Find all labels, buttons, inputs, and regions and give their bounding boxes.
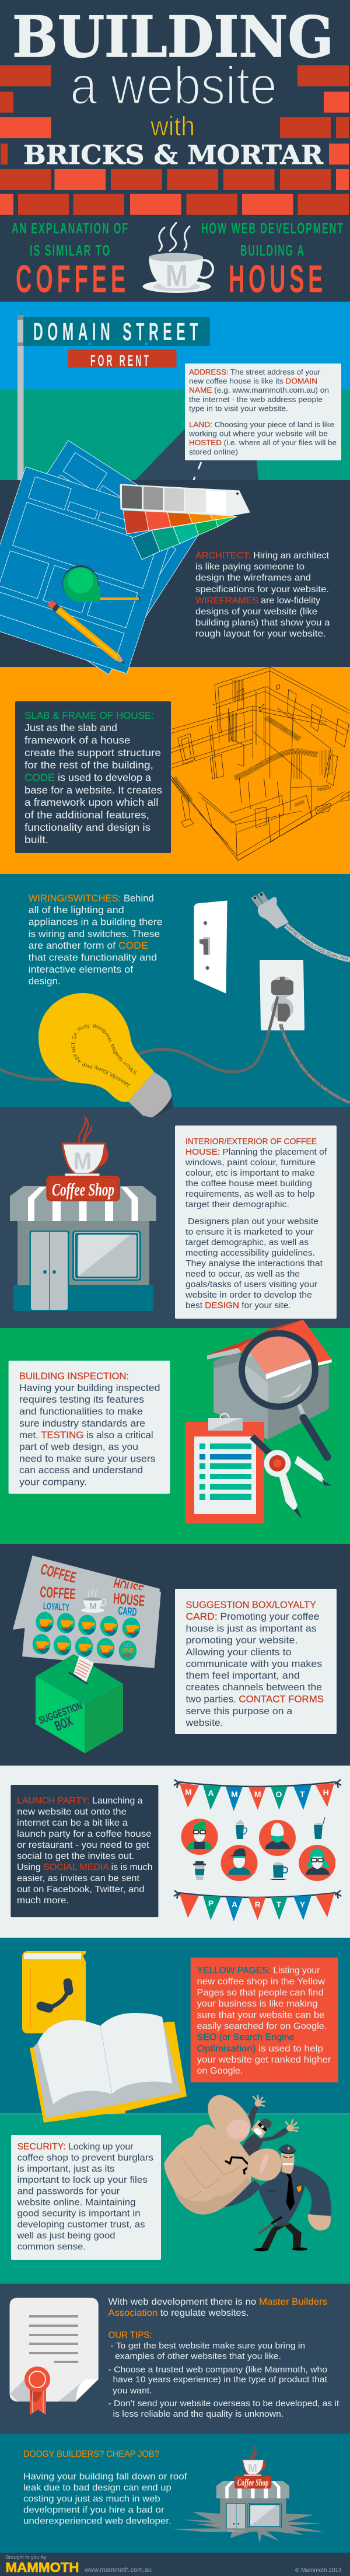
- illustration: compass: [252, 1436, 332, 1519]
- text box: launch party: new website out onto the: [17, 1807, 127, 1817]
- text box: suggestion box: CARD: Promoting your coffee: [186, 1611, 320, 1622]
- subtitle: left: [12, 219, 129, 259]
- shop: cup on roof: [62, 1117, 108, 1176]
- tape measure: [62, 565, 140, 603]
- text box: yellow pages: Pages so that people can find: [197, 1988, 323, 1998]
- sign hooks: [89, 342, 148, 351]
- sign: domain street: DOMAIN STREET: [33, 318, 202, 346]
- text box: launch party: [10, 1785, 158, 1917]
- footer: website: www.mammoth.com.au: [84, 2567, 152, 2574]
- icon: plug with cable: [251, 892, 350, 963]
- text: dodgy builders: development if you hire a bad or: [23, 2505, 164, 2515]
- sign pole: [18, 315, 24, 480]
- text box: building inspection: met. TESTING is also a critical: [19, 1429, 153, 1441]
- text box: slab and frame: for the rest of the building,: [24, 759, 153, 771]
- text box: suggestion box: [175, 1589, 337, 1734]
- text box: suggestion box: website.: [185, 1717, 223, 1728]
- icon: light switch: [194, 901, 227, 993]
- text box: security: good security is important in: [18, 2209, 140, 2218]
- text box: slab and frame: Just as the slab and: [24, 722, 117, 733]
- illustration: crack behind shop: [170, 2512, 326, 2543]
- small shop: cup: [243, 2446, 265, 2476]
- text box: yellow pages: your website get ranked higher: [197, 2055, 331, 2065]
- footer: copyright: © Mammoth 2014: [295, 2567, 342, 2574]
- text box: building inspection: part of web design, as you: [19, 1441, 138, 1452]
- text box: suggestion box: two parties. CONTACT FORMS: [186, 1693, 324, 1705]
- icon: closed phone book: [22, 1951, 86, 2033]
- shop: cup on roof: M: [74, 1148, 92, 1174]
- bricks: background wall: [0, 65, 349, 215]
- text box: suggestion box: creates channels between the: [186, 1682, 322, 1693]
- bunting: mammoth: [174, 1780, 341, 1811]
- icon: coffee cup: M: [166, 259, 188, 293]
- text box: slab and frame: [15, 701, 171, 853]
- text box: launch party: Using SOCIAL MEDIA is is much: [17, 1862, 153, 1872]
- text box: suggestion box: Allowing your clients to: [186, 1647, 292, 1658]
- text: tips list: examples of other websites that you like.: [115, 2351, 281, 2361]
- card: stamps: ONE: [122, 1648, 134, 1654]
- text: dodgy builders: [23, 2472, 187, 2526]
- text box: launch party: much more.: [17, 1896, 69, 1906]
- text box: building inspection: your company.: [19, 1476, 87, 1488]
- subtitle: left: AN EXPLANATION OF: [12, 219, 129, 237]
- suggestion box: [36, 1654, 123, 1753]
- text: wiring: that create functionality and: [29, 952, 157, 963]
- text box: yellow pages: on Google.: [197, 2066, 243, 2076]
- small shop: sign: [235, 2476, 271, 2488]
- text box: address and land: working out where your website will be: [188, 429, 328, 438]
- suggestion box: BOX: [52, 1713, 75, 1735]
- text box: security: [11, 2135, 161, 2260]
- text box: launch party: internet can be a bit like a: [17, 1818, 128, 1828]
- panel: security: [0, 2114, 350, 2284]
- loyalty card: front: HOUSE: [113, 1589, 145, 1610]
- text box: slab and frame: create the support structure: [24, 747, 161, 759]
- text: master builders intro: [108, 2297, 327, 2318]
- text box: interior and exterior: to ensure it is marketed to your: [186, 1227, 314, 1237]
- bunting: mammoth: H: [323, 1788, 329, 1797]
- text: dodgy builders: underexperienced web developer.: [23, 2516, 172, 2526]
- icon: open book: [30, 2013, 187, 2123]
- illustration: crack in front of shop: [208, 2528, 304, 2543]
- blueprint: back sheet: [0, 441, 203, 674]
- text box: slab and frame: CODE is used to develop a: [24, 771, 151, 783]
- text box: suggestion box: house is just as important as: [186, 1623, 316, 1634]
- text box: building inspection: BUILDING INSPECTION:: [19, 1371, 129, 1382]
- text box: suggestion box: serve this purpose on a: [186, 1705, 293, 1717]
- text box: interior and exterior: target their demographic.: [186, 1200, 289, 1210]
- loyalty card: front: LOYALTY: [43, 1600, 70, 1613]
- footer: [0, 2553, 350, 2576]
- text box: security: is important, just as its: [18, 2164, 114, 2174]
- text box: interior and exterior: target demographic, as well as: [186, 1238, 309, 1247]
- text box: suggestion box: communicate with you makes: [186, 1658, 322, 1669]
- text box: interior and exterior: windows, paint colour, furniture: [185, 1158, 316, 1168]
- text box: yellow pages: sure that your website can be: [197, 2011, 325, 2020]
- text box: slab and frame: SLAB & FRAME OF HOUSE:: [24, 709, 154, 721]
- blueprint: front sheet: [0, 467, 178, 673]
- text box: launch party: launch party for a coffee house: [17, 1829, 152, 1839]
- text: architect: [195, 551, 330, 639]
- shop: sign: [46, 1176, 120, 1201]
- text box: address and land: the internet - the web address people: [189, 395, 323, 404]
- card: small cup: M: [89, 1602, 97, 1612]
- text box: yellow pages: new coffee shop in the Yellow: [197, 1977, 326, 1987]
- title: with: with: [150, 111, 195, 141]
- loyalty card: front: CARD: [118, 1605, 137, 1619]
- card: stamps: [33, 1612, 140, 1661]
- text: tips list: - To get the best website make sure you bring in: [111, 2341, 305, 2351]
- text box: yellow pages: YELLOW PAGES: Listing your: [197, 1966, 320, 1976]
- text: wiring: all of the lighting and: [29, 904, 124, 915]
- illustration: coffee shop: [10, 1117, 156, 1311]
- text box: launch party: social to get the invites out.: [17, 1851, 134, 1861]
- cable: outlet to edge: [279, 1023, 350, 1105]
- text box: address and land: NAME (e.g. www.mammoth.com.au) on: [189, 386, 329, 394]
- text box: interior and exterior: requirements, as well as to help: [186, 1189, 315, 1199]
- heading: dodgy builders: DODGY BUILDERS? CHEAP JOB?: [23, 2449, 159, 2459]
- loyalty card: back: COFFEE: [38, 1560, 78, 1586]
- card: stamps: FREE: [123, 1653, 133, 1659]
- card: small cup: [81, 1589, 106, 1613]
- text box: address and land: HOSTED (i.e. where all of your files will be: [189, 438, 337, 447]
- icon: certificate: [9, 2298, 99, 2415]
- text: wiring: is wiring and switches. These: [29, 928, 160, 939]
- text: dodgy builders: Having your building fall down or roof: [23, 2472, 187, 2482]
- small shop: window: [247, 2503, 282, 2528]
- panel: suggestion box and loyalty card: [0, 1544, 350, 1766]
- text box: security: coffee shop to prevent burglars: [18, 2153, 153, 2163]
- icon: iced drink: [314, 1817, 325, 1839]
- bunting: party: P: [208, 1899, 214, 1908]
- panel: building inspection: [0, 1320, 350, 1544]
- text: architect: designs of your website (like: [195, 607, 317, 617]
- text box: yellow pages: your business is like making: [197, 1999, 317, 2009]
- text box: security: developing customer trust, as: [18, 2220, 145, 2230]
- text box: launch party: easier, as invites can be sent: [17, 1874, 140, 1883]
- text: architect: is like paying someone to: [195, 562, 304, 572]
- avatar: teal hair woman: [299, 1845, 335, 1881]
- icon: wall outlet: [260, 960, 304, 1030]
- text: tips list: [108, 2341, 340, 2419]
- swatches: grey strip: [120, 484, 250, 516]
- text box: interior and exterior: need to occur, as well as the: [186, 1269, 300, 1279]
- shop: door: [30, 1231, 69, 1310]
- icon: cup on saucer: [269, 1862, 288, 1880]
- pencil: [47, 600, 127, 666]
- text box: building inspection: sure industry standards are: [19, 1418, 145, 1429]
- cable: outlet to edge: CSS3, HTML5, PHP, JAVASCRIPT, JQUERY, ASP.NET, C#, RUBY, MAGENTO, WORDPRESS, SITECORE: [280, 1024, 350, 1103]
- small shop: wall: [220, 2498, 286, 2531]
- thumb: [247, 2148, 281, 2180]
- text box: security: important to lock up your files: [18, 2175, 148, 2185]
- panel: yellow pages: [0, 1938, 350, 2123]
- text box: launch party: or restaurant - you need to get: [17, 1840, 149, 1850]
- cable: bulb to outlet: [0, 997, 278, 1079]
- shop: base: [13, 1285, 153, 1311]
- wireframe house: [171, 667, 349, 861]
- sign: for rent: [68, 349, 176, 369]
- text box: interior and exterior: [175, 1126, 337, 1319]
- suggestion box: SUGGESTION: [37, 1700, 84, 1726]
- swatches: orange strip: [123, 511, 237, 534]
- text: master builders intro: Association to regulate websites.: [108, 2308, 249, 2318]
- text: tips list: you want.: [113, 2386, 152, 2396]
- text box: slab and frame: built.: [24, 834, 48, 845]
- text: architect: building plans) that show you a: [195, 618, 330, 628]
- text: wiring: appliances in a building there: [29, 916, 163, 928]
- text box: yellow pages: easily searched for on Google.: [197, 2021, 327, 2032]
- panel: domain and land: [0, 302, 350, 480]
- loyalty card: back: HOUSE: [111, 1575, 145, 1599]
- small shop: door: [226, 2503, 246, 2531]
- text box: building inspection: can access and understand: [19, 1464, 143, 1476]
- small shop: awning: [216, 2481, 289, 2498]
- bunting: party: R: [255, 1900, 261, 1909]
- shop: awning: [10, 1186, 156, 1221]
- text box: address and land: type in to visit your website.: [189, 404, 288, 413]
- text box: interior and exterior: HOUSE: Planning the placement of: [186, 1147, 327, 1157]
- text box: slab and frame: functionality and design is: [24, 822, 150, 833]
- road: [135, 427, 258, 480]
- sign: for rent: FOR RENT: [90, 352, 151, 369]
- subtitle: right: [201, 219, 344, 259]
- illustration: house: [207, 1320, 332, 1439]
- text box: address and land: stored online): [189, 448, 238, 456]
- subtitle: left: IS SIMILAR TO: [30, 242, 111, 259]
- text box: yellow pages: SEO (or Search Engine: [197, 2033, 295, 2042]
- icon: plug with cable: ASP.NET, HTML5, CSS3, jQuery, PHP: [285, 925, 349, 960]
- text box: building inspection: requires testing its features: [19, 1394, 144, 1405]
- swatches: green strip: [132, 516, 237, 560]
- panel: header: [0, 0, 350, 302]
- illustration: sinking coffee shop: [216, 2446, 289, 2531]
- text box: launch party: LAUNCH PARTY: Launching a: [17, 1796, 143, 1806]
- bunting: party: T: [276, 1900, 282, 1909]
- text box: building inspection: [9, 1361, 170, 1494]
- text: architect: WIREFRAMES are low-fidelity: [195, 596, 320, 606]
- text: architect: ARCHITECT: Hiring an architect: [195, 551, 330, 561]
- text box: slab and frame: base for a website. It creates: [24, 784, 162, 796]
- panel: architect: [0, 441, 350, 674]
- panel: master builders and tips: [0, 2284, 350, 2434]
- title: Building: BUILDING: [12, 4, 334, 70]
- text box: security: website online. Maintaining: [16, 2197, 136, 2208]
- text box: yellow pages: Optimisation) is used to help: [197, 2044, 323, 2054]
- footer: mammoth logo: MAMMOTH: [6, 2560, 79, 2575]
- text: tips list: - Don’t send your website overseas to be developed, as it: [108, 2399, 340, 2409]
- road markings: [194, 462, 201, 480]
- text: tips list: is less reliable and the quality is unknown.: [113, 2409, 284, 2419]
- panel: interior and exterior of coffee house: [0, 1107, 350, 1328]
- text: wiring: [29, 893, 163, 987]
- text box: address and land: ADDRESS: The street address of your: [189, 368, 321, 376]
- illustration: magnifying glass: [242, 1333, 327, 1457]
- icon: mug with foam: [236, 1819, 247, 1839]
- illustration: fist, burglar and police officer: [164, 2095, 331, 2251]
- text box: interior and exterior: best DESIGN for your site.: [186, 1301, 290, 1310]
- shop: building wall: [18, 1221, 149, 1285]
- icon: light bulb: [38, 993, 173, 1117]
- text box: slab and frame: a framework upon which all: [24, 796, 159, 808]
- text box: suggestion box: SUGGESTION BOX/LOYALTY: [186, 1599, 316, 1610]
- text box: interior and exterior: goals/tasks of users visiting your: [186, 1280, 317, 1289]
- text: architect: rough layout for your website.: [195, 629, 326, 639]
- heading: coffee: COFFEE: [16, 257, 130, 301]
- small shop: cup: M: [248, 2462, 257, 2475]
- text box: yellow pages: [191, 1958, 338, 2082]
- icon: takeaway cup: [193, 1861, 206, 1880]
- text box: interior and exterior: website in order to develop the: [185, 1290, 312, 1300]
- text box: slab and frame: framework of a house: [24, 734, 131, 746]
- title: a website: a website: [70, 56, 277, 116]
- bunting: mammoth: O: [276, 1789, 282, 1799]
- panel: launch party: [0, 1766, 350, 1938]
- text box: building inspection: Having your building inspected: [19, 1382, 160, 1393]
- icon: light bulb: Javascript, jQuery, PHP, ASP.NET, C#, Ruby, Wordpress, Magento, HTML5, CSS3: [71, 1023, 136, 1088]
- burglar: [240, 2096, 299, 2159]
- text: tips list: - Choose a trusted web company (like Mammoth, who: [108, 2365, 327, 2375]
- text: wiring: interactive elements of: [29, 964, 133, 975]
- panel: wiring and switches: [0, 874, 350, 1117]
- text box: interior and exterior: INTERIOR/EXTERIOR OF COFFEE: [186, 1137, 317, 1147]
- text: dodgy builders: costing you just as much in web: [23, 2494, 160, 2504]
- colour swatches: [120, 484, 250, 560]
- text box: address and land: [185, 363, 341, 460]
- text: dodgy builders: leak due to bad design can end up: [23, 2483, 172, 2493]
- shop: window: [72, 1231, 141, 1281]
- loyalty card: front: [22, 1580, 161, 1668]
- bunting: mammoth: A: [208, 1788, 214, 1798]
- text box: security: common sense.: [18, 2242, 86, 2252]
- text box: building inspection: need to make sure your users: [19, 1453, 155, 1464]
- text box: security: SECURITY: Locking up your: [18, 2142, 134, 2152]
- text box: suggestion box: them feel important, and: [186, 1670, 300, 1681]
- bunting: party: A: [232, 1900, 237, 1909]
- text: architect: specifications for your website.: [195, 585, 329, 595]
- avatar: cap man: [220, 1845, 258, 1881]
- footer: brought to you by: Brought to you by: [6, 2554, 47, 2561]
- text: tips list: have 10 years experience) in the type of product that: [113, 2375, 328, 2385]
- text box: interior and exterior: Designers plan out your website: [188, 1217, 318, 1226]
- loyalty card: back: [13, 1556, 160, 1630]
- text box: interior and exterior: colour, etc is important to make: [186, 1168, 315, 1178]
- loyalty card: front: COFFEE: [40, 1583, 76, 1603]
- text box: address and land: LAND: Choosing your piece of land is like: [189, 420, 334, 429]
- text box: interior and exterior: meeting accessibility guidelines.: [186, 1248, 315, 1258]
- icon: coffee cup: [142, 223, 213, 293]
- police officer: [222, 2144, 331, 2251]
- text: wiring: are another form of CODE: [29, 940, 148, 951]
- text box: security: well as just being good: [16, 2231, 116, 2241]
- text box: launch party: out on Facebook, Twitter, and: [17, 1885, 145, 1895]
- text: architect: design the wireframes and: [195, 573, 311, 583]
- text box: building inspection: and functionalities to make: [19, 1406, 143, 1417]
- panel: dodgy builders: [0, 2434, 350, 2553]
- text box: suggestion box: promoting your website.: [186, 1635, 298, 1645]
- text box: address and land: new coffee house is like its DOMAIN: [189, 377, 317, 385]
- heading: our tips: OUR TIPS:: [108, 2330, 152, 2340]
- bunting: mammoth: M: [254, 1789, 261, 1799]
- bunting: party: [174, 1890, 341, 1921]
- text: wiring: design.: [29, 976, 61, 987]
- shop: sign: Coffee Shop: [52, 1179, 114, 1200]
- certificate: rosette: [24, 2367, 50, 2415]
- bunting: mammoth: M: [231, 1789, 238, 1799]
- illustration: clipboard: [186, 1413, 264, 1523]
- card: stamps: GET: [124, 1644, 132, 1648]
- text: wiring: WIRING/SWITCHES: Behind: [29, 893, 154, 904]
- text box: slab and frame: of the additional features,: [24, 809, 149, 820]
- text box: security: and passwords for your: [18, 2187, 120, 2196]
- panel: slab and frame: [0, 667, 350, 874]
- avatar: bearded man: [259, 1820, 296, 1856]
- text: master builders intro: With web development there is no Master Builders: [108, 2297, 327, 2307]
- small shop: sign: Coffee Shop: [237, 2478, 268, 2488]
- title: bricks and mortar: BRICKS & MORTAR: [23, 139, 324, 170]
- avatar: green hair man: [181, 1819, 218, 1855]
- subtitle: right: BUILDING A: [240, 242, 305, 259]
- text box: interior and exterior: They analyse the interactions that: [186, 1259, 323, 1268]
- bunting: mammoth: M: [185, 1787, 192, 1796]
- bunting: mammoth: T: [300, 1789, 305, 1799]
- bunting: party: Y: [300, 1900, 306, 1909]
- text box: interior and exterior: the coffee house meet building: [186, 1179, 312, 1189]
- sign: domain street: [23, 317, 210, 346]
- burglar legs: [225, 2157, 250, 2175]
- fist: [164, 2095, 253, 2215]
